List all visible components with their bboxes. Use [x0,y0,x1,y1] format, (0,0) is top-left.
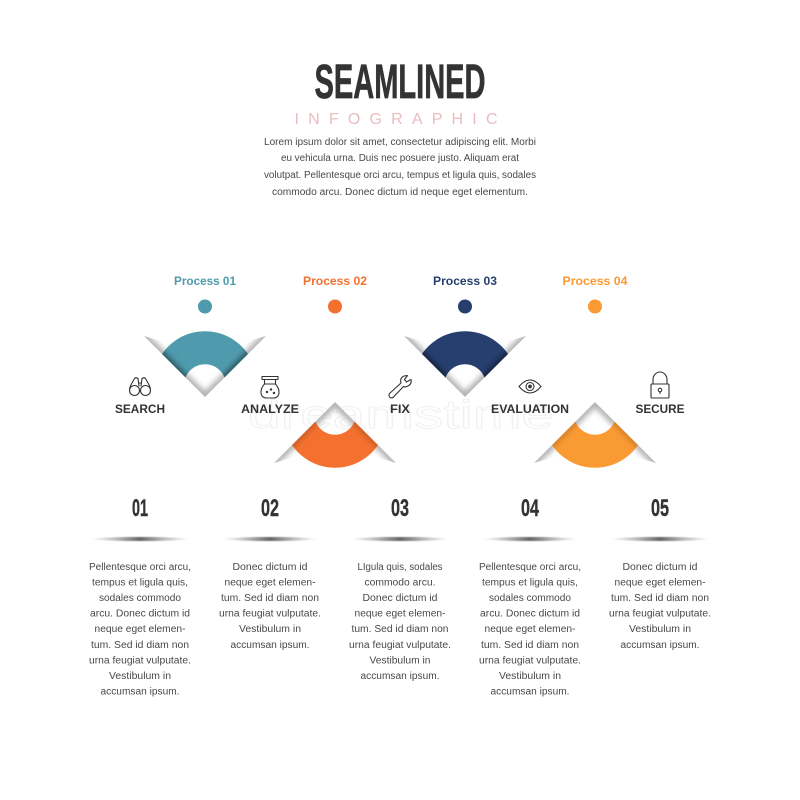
column 03: urna feugiat vulputate. [349,640,451,651]
column 02: accumsan ipsum. [230,640,310,651]
column 04: 04 [521,495,539,522]
column 02 [219,495,321,651]
seam shape: process 02 [274,402,396,468]
column 01: sodales commodo [99,593,181,604]
column 05: Donec dictum id [622,562,698,573]
column 05: accumsan ipsum. [620,640,700,651]
process 03 label and dot [433,274,497,314]
icon: padlock [651,372,669,398]
column 03 [349,495,451,682]
column 05: 05 [651,495,669,522]
process 02 label and dot: Process 02 [303,274,367,288]
icon: flask [261,376,279,398]
column 02: urna feugiat vulputate. [219,609,321,620]
column 05 [609,495,711,651]
column 04: tum. Sed id diam non [481,640,579,651]
column 01: neque eget elemen- [94,624,186,635]
column 04: Vestibulum in [499,671,561,682]
column 02: 02 [261,495,279,522]
column 01 [89,495,191,698]
column 03: accumsan ipsum. [360,671,440,682]
column 02: tum. Sed id diam non [221,593,319,604]
column 04: arcu. Donec dictum id [480,609,580,620]
intro paragraph: Lorem ipsum dolor sit amet, consectetur adipiscing elit. Morbi [264,137,536,148]
column 01: Pellentesque orci arcu, [89,562,191,573]
column 01: 01 [132,495,148,522]
column 04: sodales commodo [489,593,571,604]
column 04 [479,495,581,698]
step label: fix: FIX [390,402,410,416]
column 04: accumsan ipsum. [490,686,570,698]
column 03: LIgula quis, sodales [358,562,442,573]
column 03: 03 [391,495,409,522]
step label: secure: SECURE [636,402,684,416]
subtitle: INFOGRAPHIC [294,111,498,128]
title: SEAMLINED [314,56,486,109]
column 05: urna feugiat vulputate. [609,609,711,620]
watermark: dreamstime [248,393,554,437]
column 04: tempus et ligula quis, [482,578,578,588]
process 02 label and dot [303,274,367,314]
column 01: accumsan ipsum. [100,686,180,698]
intro paragraph: volutpat. Pellentesque orci arcu, tempus et ligula quis, sodales [264,170,536,181]
column 05: Vestibulum in [629,624,691,635]
seam shape: process 04 [534,402,656,468]
column 04: neque eget elemen- [484,624,576,635]
process 01 label and dot [174,274,236,314]
icon: wrench [389,376,411,398]
column 01: tempus et ligula quis, [92,578,188,588]
process 04 label and dot [562,274,628,314]
intro paragraph: eu vehicula urna. Duis nec posuere justo. Aliquam erat [281,153,519,164]
column 01: arcu. Donec dictum id [90,609,190,620]
process 03 label and dot: Process 03 [433,274,497,288]
column 03: neque eget elemen- [354,609,446,620]
column 05: tum. Sed id diam non [611,593,709,604]
column 01: tum. Sed id diam non [91,640,189,651]
icon: eye [519,380,541,393]
column 02: neque eget elemen- [224,578,316,588]
step label: evaluation: EVALUATION [491,402,569,416]
step label: search: SEARCH [115,402,165,416]
column 03: Donec dictum id [362,593,438,604]
column 02: Donec dictum id [232,562,308,573]
column 04: urna feugiat vulputate. [479,655,581,666]
column 03: Vestibulum in [370,655,430,666]
intro paragraph: commodo arcu. Donec dictum id neque eget elementum. [272,187,528,198]
process 01 label and dot: Process 01 [174,274,236,288]
column 01: Vestibulum in [109,671,171,682]
seam shape: process 01 [144,331,266,397]
seam shape: process 03 [404,331,526,397]
column 04: Pellentesque orci arcu, [479,562,581,573]
icon: binoculars [130,378,150,396]
step label: analyze: ANALYZE [241,402,299,416]
process 04 label and dot: Process 04 [562,274,628,288]
column 03: commodo arcu. [364,578,436,588]
intro paragraph [264,137,536,198]
column 01: urna feugiat vulputate. [89,655,191,666]
column 03: tum. Sed id diam non [352,624,448,635]
column 05: neque eget elemen- [614,578,706,588]
column 02: Vestibulum in [239,624,301,635]
